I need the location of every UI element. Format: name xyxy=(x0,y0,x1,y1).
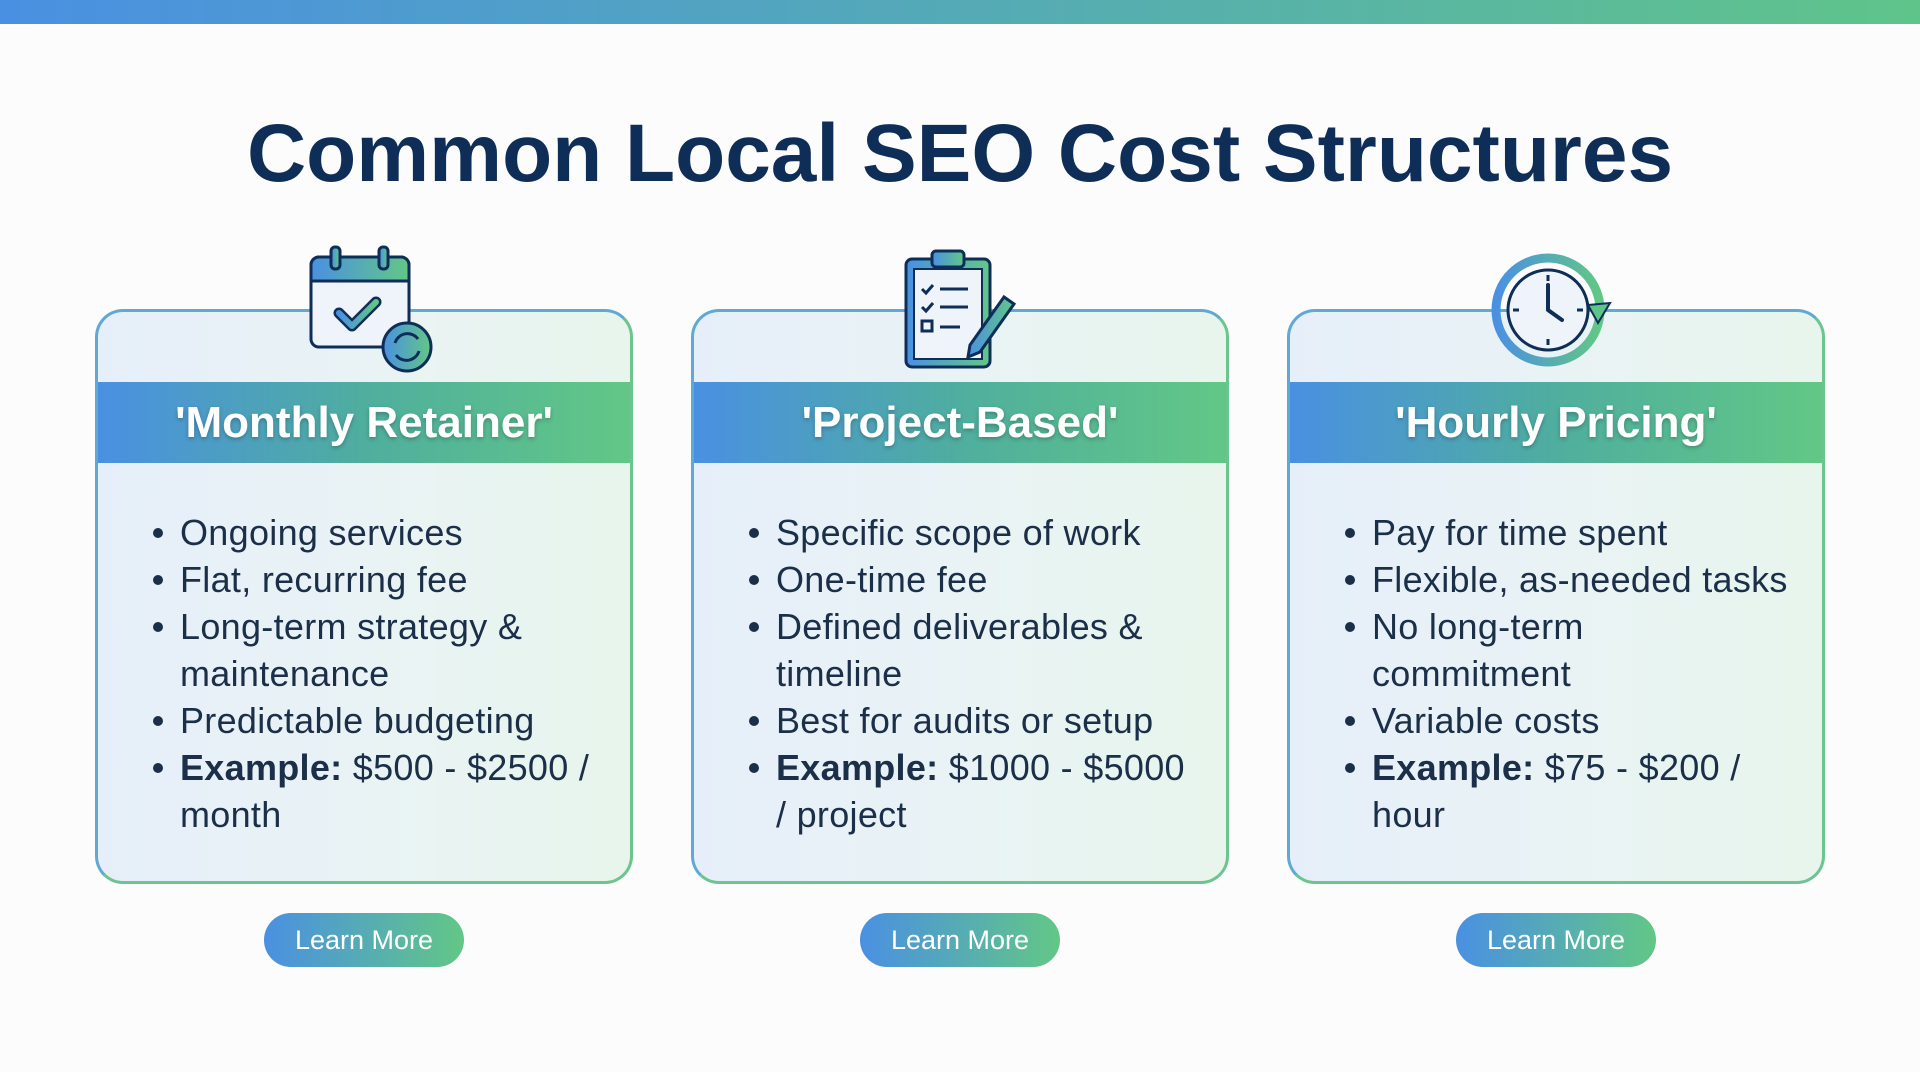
bullets: hourly pricing: No long-term xyxy=(1372,606,1584,647)
bullets: monthly retainer: Ongoing services xyxy=(180,512,463,553)
bullets: monthly retainer xyxy=(153,512,589,835)
panel: monthly retainer xyxy=(95,309,633,884)
icon: calendar xyxy=(310,246,432,372)
button: learn more 1 xyxy=(264,913,464,967)
bullets: hourly pricing xyxy=(1345,512,1788,835)
bullets: project-based: Specific scope of work xyxy=(776,512,1141,553)
bullets: hourly pricing: Variable costs xyxy=(1372,700,1600,741)
bullets: project-based: / project xyxy=(776,794,907,835)
header: monthly retainer xyxy=(98,382,630,463)
bullets: monthly retainer: Predictable budgeting xyxy=(180,700,535,741)
bullets: monthly retainer: month xyxy=(180,794,282,835)
bullets: hourly pricing: hour xyxy=(1372,794,1445,835)
bullets: project-based: timeline xyxy=(776,653,902,694)
header: hourly pricing: 'Hourly Pricing' xyxy=(1395,398,1717,447)
header: hourly pricing xyxy=(1290,382,1822,463)
button: learn more 3: Learn More xyxy=(1487,925,1625,955)
header: project-based xyxy=(694,382,1226,463)
bullets: project-based: Best for audits or setup xyxy=(776,700,1153,741)
button: learn more 2 xyxy=(860,913,1060,967)
bullets: project-based: One-time fee xyxy=(776,559,988,600)
bullets: monthly retainer: Flat, recurring fee xyxy=(180,559,468,600)
header: monthly retainer: 'Monthly Retainer' xyxy=(175,398,553,447)
title: Common Local SEO Cost Structures xyxy=(247,108,1673,199)
bullets: hourly pricing: commitment xyxy=(1372,653,1571,694)
bullets: monthly retainer: Long-term strategy & xyxy=(180,606,522,647)
bullets: monthly retainer: Example: $500 - $2500 / xyxy=(180,747,589,788)
bullets: project-based: Defined deliverables & xyxy=(776,606,1143,647)
icon: clipboard xyxy=(904,250,1016,368)
button: learn more 1: Learn More xyxy=(295,925,433,955)
bullets: hourly pricing: Flexible, as-needed tasks xyxy=(1372,559,1788,600)
bullets: hourly pricing: Pay for time spent xyxy=(1372,512,1668,553)
panel: project-based xyxy=(691,309,1229,884)
header: project-based: 'Project-Based' xyxy=(802,398,1118,447)
icon: clock xyxy=(1492,254,1612,366)
button: learn more 3 xyxy=(1456,913,1656,967)
bullets: hourly pricing: Example: $75 - $200 / xyxy=(1372,747,1741,788)
button: learn more 2: Learn More xyxy=(891,925,1029,955)
bullets: project-based: Example: $1000 - $5000 xyxy=(776,747,1185,788)
bullets: project-based xyxy=(749,512,1185,835)
panel: hourly pricing xyxy=(1287,309,1825,884)
bullets: monthly retainer: maintenance xyxy=(180,653,389,694)
